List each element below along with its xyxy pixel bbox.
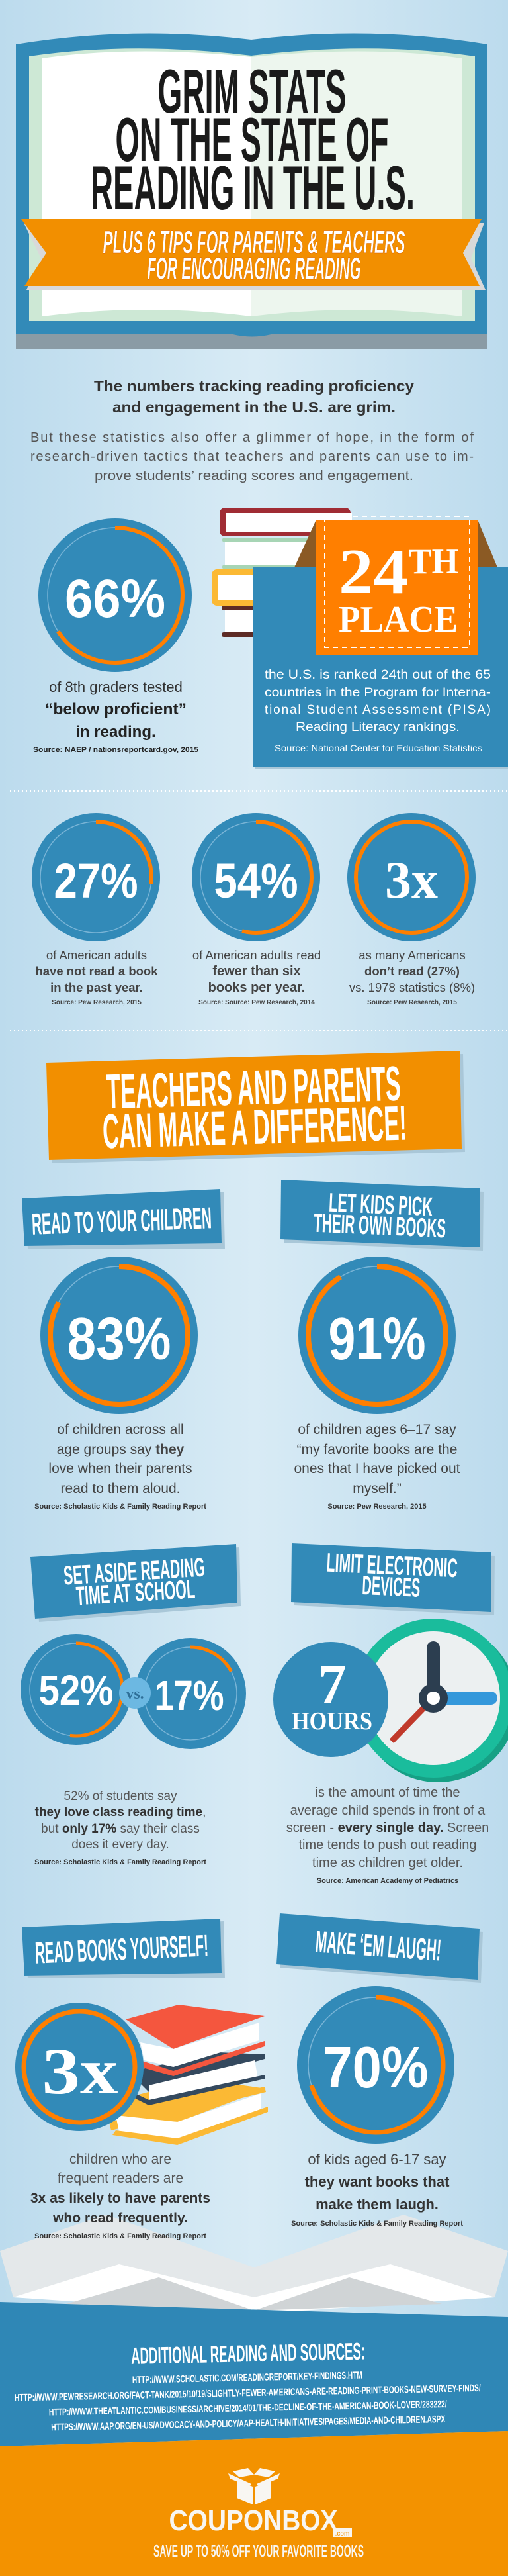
- stat: 54%: of American adults read: [192, 948, 321, 962]
- stat: 83%: [34, 1257, 206, 1511]
- icon: clock with 7 hours: Source: American Academy of Pediatrics: [317, 1877, 458, 1885]
- stat: 91%: [294, 1257, 460, 1511]
- icon: clock with 7 hours: is the amount of time the: [315, 1786, 460, 1800]
- stat: 52% vs 17%: vs.: [126, 1686, 144, 1703]
- subtitle ribbon: [21, 219, 486, 290]
- stat: 54%: Source: Source: Pew Research, 2014: [198, 999, 315, 1006]
- footer: couponbox logo: .com: [335, 2530, 349, 2538]
- stat: 52% vs 17%: but only 17% say their class: [41, 1822, 200, 1836]
- label: read to your children: [22, 1189, 225, 1249]
- icon: box: [228, 2468, 280, 2504]
- stat: 70%: Source: Scholastic Kids & Family Reading Report: [291, 2220, 463, 2228]
- icon: clock with 7 hours: screen - every single day. Screen: [286, 1821, 489, 1835]
- stat: 27%: in the past year.: [50, 980, 143, 994]
- panel: 24th place: [253, 516, 508, 769]
- icon: clock with 7 hours: time as children get older.: [312, 1856, 463, 1870]
- label: set aside reading time at school: [30, 1544, 241, 1622]
- label: limit electronic devices: [291, 1543, 495, 1615]
- panel: 24th place: tional Student Assessment (PISA): [265, 703, 491, 717]
- header: open book with title: [16, 34, 487, 349]
- panel: 24th place: the U.S. is ranked 24th out of the 65: [265, 668, 491, 682]
- stat: 91%: “my favorite books are the: [297, 1442, 457, 1457]
- stat: 91%: myself.”: [353, 1481, 402, 1496]
- stat: 66%: of 8th graders tested: [49, 679, 183, 695]
- stat: 66%: Source: NAEP / nationsreportcard.gov, 2015: [33, 746, 198, 754]
- stat: 3x frequent readers: frequent readers are: [58, 2171, 183, 2186]
- footer: additional reading and sources: [0, 2302, 508, 2446]
- stat: 3x frequent readers: Source: Scholastic Kids & Family Reading Report: [34, 2232, 206, 2240]
- stat: 27%: Source: Pew Research, 2015: [52, 999, 142, 1006]
- stat: 83%: read to them aloud.: [61, 1481, 180, 1496]
- intro text: research-driven tactics that teachers and parents can use to im-: [30, 450, 474, 464]
- text: READ TO YOUR CHILDREN: [31, 1200, 212, 1241]
- stat: 3x frequent readers: [15, 2003, 210, 2240]
- stat: 3x frequent readers: who read frequently.: [52, 2211, 188, 2226]
- stat: 3x: as many Americans: [359, 948, 466, 962]
- icon: clock with 7 hours: 7: [318, 1652, 347, 1716]
- stat: 91%: 91%: [328, 1306, 426, 1372]
- stat: 83%: 83%: [67, 1306, 171, 1372]
- stat: 66%: [33, 518, 198, 754]
- label: set aside reading time at school: SET ASIDE READING: [63, 1553, 206, 1591]
- intro text: and engagement in the U.S. are grim.: [112, 399, 396, 416]
- title: [91, 56, 415, 222]
- stat: 3x frequent readers: children who are: [69, 2152, 171, 2167]
- stat: 54%: fewer than six: [212, 964, 301, 978]
- stat: 52% vs 17%: 17%: [155, 1672, 224, 1719]
- intro text: But these statistics also offer a glimmer of hope, in the form of: [30, 430, 474, 445]
- label: read books yourself: [22, 1919, 225, 1978]
- icon: clock with 7 hours: [273, 1619, 508, 1885]
- stat: 91%: of children ages 6–17 say: [298, 1422, 456, 1437]
- stat: 70%: 70%: [323, 2034, 429, 2100]
- label: set aside reading time at school: TIME AT SCHOOL: [75, 1575, 196, 1611]
- stat: 70%: [291, 1986, 463, 2228]
- banner: teachers and parents: [46, 1051, 465, 1163]
- panel: 24th place: TH: [409, 542, 458, 581]
- stat: 66%: in reading.: [75, 723, 156, 741]
- stat: 52% vs 17%: they love class reading time,: [35, 1805, 206, 1819]
- stat: 83%: age groups say they: [57, 1442, 185, 1457]
- stat: 27%: of American adults: [46, 948, 147, 962]
- stat: 52% vs 17%: 52%: [38, 1666, 114, 1714]
- panel: 24th place: 24: [339, 536, 408, 608]
- stat: 83%: Source: Scholastic Kids & Family Reading Report: [34, 1503, 206, 1511]
- footer: couponbox logo: [0, 2431, 508, 2576]
- intro text: The numbers tracking reading proficiency: [94, 377, 414, 395]
- decorative open book pages at bottom: [0, 2215, 508, 2314]
- stat: 52% vs 17%: 52% of students say: [64, 1789, 177, 1803]
- stat: 54%: 54%: [214, 853, 298, 908]
- stat: 54%: [192, 813, 321, 1006]
- stat: 3x: vs. 1978 statistics (8%): [349, 980, 475, 994]
- footer: additional reading and sources: HTTP://WWW.SCHOLASTIC.COM/READINGREPORT/KEY-FINDINGS.HTM: [132, 2370, 362, 2386]
- footer: couponbox logo: COUPONBOX: [169, 2504, 337, 2537]
- stat: 3x: [347, 813, 476, 1006]
- stat: 91%: Source: Pew Research, 2015: [327, 1503, 427, 1511]
- stat: 52% vs 17%: [21, 1634, 246, 1866]
- stat: 3x: Source: Pew Research, 2015: [367, 999, 457, 1006]
- stat: 83%: love when their parents: [48, 1461, 192, 1476]
- stat: 70%: make them laugh.: [316, 2196, 439, 2213]
- panel: 24th place: PLACE: [339, 599, 458, 640]
- stat: 52% vs 17%: does it every day.: [71, 1838, 169, 1852]
- icon: book stack: [212, 508, 352, 637]
- stat: 27%: 27%: [54, 853, 138, 908]
- stat: 83%: of children across all: [57, 1422, 184, 1437]
- label: make em laugh: [276, 1913, 483, 1983]
- stat: 27%: have not read a book: [35, 964, 158, 978]
- stat: 70%: they want books that: [305, 2173, 450, 2190]
- stat: 3x frequent readers: 3x: [42, 2034, 118, 2108]
- panel: 24th place: Source: National Center for Education Statistics: [275, 743, 482, 753]
- stat: 70%: of kids aged 6-17 say: [308, 2151, 446, 2168]
- icon: clock with 7 hours: HOURS: [292, 1707, 372, 1735]
- panel: 24th place: Reading Literacy rankings.: [296, 720, 460, 734]
- stat: 66%: “below proficient”: [45, 700, 187, 718]
- icon: clock with 7 hours: time tends to push out reading: [298, 1838, 477, 1852]
- icon: clock with 7 hours: average child spends in front of a: [290, 1803, 486, 1818]
- stat: 3x: don’t read (27%): [364, 964, 460, 978]
- panel: 24th place: countries in the Program for Interna-: [265, 686, 491, 700]
- icon: bottom book stack: [106, 2005, 268, 2145]
- label: let kids pick their own books: [280, 1180, 484, 1251]
- intro text: prove students’ reading scores and engagement.: [95, 469, 413, 483]
- stat: 27%: [32, 813, 160, 1006]
- text: READ BOOKS YOURSELF!: [34, 1928, 209, 1970]
- stat: 3x: 3x: [385, 851, 438, 910]
- stat: 91%: ones that I have picked out: [294, 1461, 460, 1476]
- stat: 3x frequent readers: 3x as likely to have parents: [30, 2191, 210, 2206]
- label: limit electronic devices: DEVICES: [361, 1571, 421, 1603]
- stat: 52% vs 17%: Source: Scholastic Kids & Family Reading Report: [34, 1858, 206, 1866]
- stat: 54%: books per year.: [208, 980, 305, 995]
- stat: 66%: 66%: [65, 569, 165, 629]
- intro text: [30, 377, 474, 483]
